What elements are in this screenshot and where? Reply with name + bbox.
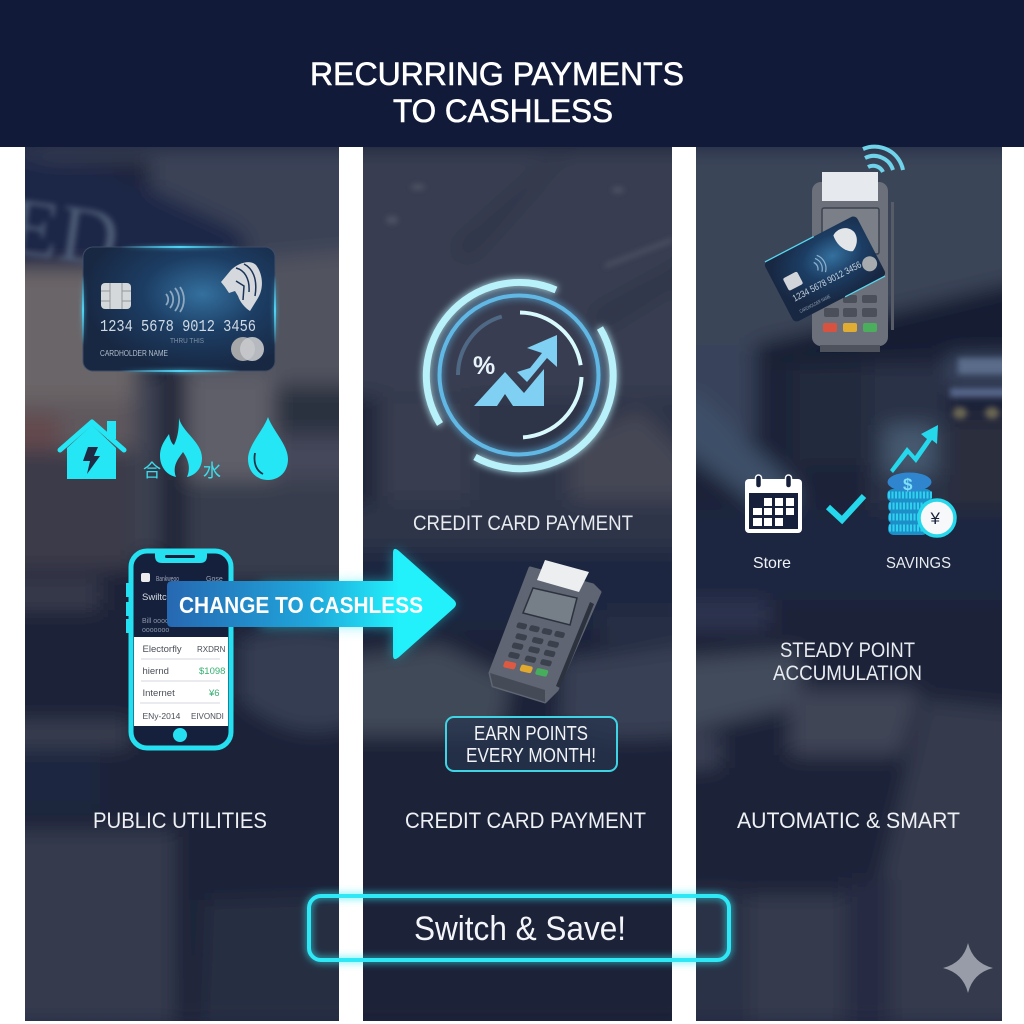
header band — [0, 0, 1024, 147]
icon: phone with bills: ooooooo — [142, 627, 169, 634]
panel: public utilities background — [25, 147, 339, 1021]
percent sign: % — [473, 352, 495, 380]
label: credit card payment column: CREDIT CARD PAYMENT — [405, 808, 646, 833]
icon: phone with bills: Gose — [206, 576, 223, 583]
icon: water drop — [248, 417, 288, 480]
arrow: change to cashless — [167, 548, 457, 660]
icon: phone with bills — [126, 551, 231, 748]
icon: credit card — [82, 246, 276, 372]
icon: flame — [143, 418, 221, 481]
icon: phone with bills: Swiltc — [142, 592, 167, 603]
icon: card terminal — [490, 560, 600, 702]
label: steady point accumulation: STEADY POINT — [780, 639, 915, 662]
bill rows: Internet — [142, 688, 175, 699]
card number: 1234 5678 9012 3456 — [100, 318, 256, 337]
label: credit card payment: CREDIT CARD PAYMENT — [413, 512, 633, 535]
icon: growth chart ring — [426, 282, 613, 469]
gas label: 合 — [143, 461, 161, 481]
icon: check mark — [828, 496, 864, 520]
card small text: THRU THIS — [170, 338, 204, 345]
icon: terminal with tapped card — [763, 147, 903, 352]
label: steady point accumulation: ACCUMULATION — [773, 662, 922, 685]
icon: lion emblem — [221, 262, 262, 311]
dollar sign: $ — [903, 475, 913, 494]
tapped card — [763, 215, 887, 323]
arrow: change to cashless: CHANGE TO CASHLESS — [179, 592, 423, 618]
water label: 水 — [203, 461, 221, 481]
icon: house with lightning — [60, 421, 124, 479]
bill rows: hiernd — [142, 666, 169, 677]
bill rows: ENy-2014 — [142, 711, 181, 721]
icon: sparkle — [943, 943, 993, 993]
title — [310, 56, 684, 129]
callout: earn points — [446, 717, 617, 771]
call to action: switch and save: Switch & Save! — [414, 910, 626, 948]
bill rows: $1098 — [199, 666, 225, 677]
title: RECURRING PAYMENTS — [310, 56, 684, 92]
bill rows: RXDRN — [197, 645, 226, 654]
label: store: Store — [753, 555, 791, 572]
bill rows — [142, 644, 226, 721]
call to action: switch and save — [309, 896, 729, 960]
bill rows: Electorfly — [142, 644, 182, 655]
bill rows: ¥6 — [208, 688, 220, 699]
callout: earn points: EVERY MONTH! — [466, 745, 596, 767]
panel: public utilities background: ED — [3, 180, 124, 285]
panel: credit card payment background — [363, 147, 672, 1021]
icon: coin stack and growth arrow — [887, 425, 955, 536]
wifi arcs — [863, 147, 903, 172]
icon: credit card: CARDHOLDER NAME — [100, 349, 168, 358]
label: automatic and smart: AUTOMATIC & SMART — [737, 808, 960, 833]
tapped card: CARDHOLDER NAME — [799, 294, 832, 315]
phone header text: Bankweoo — [156, 576, 179, 583]
callout: earn points: EARN POINTS — [474, 723, 588, 745]
title: TO CASHLESS — [393, 93, 613, 129]
bill rows: EIVONDI — [191, 712, 224, 721]
tapped card: 1234 5678 9012 3456 — [791, 260, 863, 304]
label: savings: SAVINGS — [886, 555, 951, 572]
panel: automatic and smart background — [696, 147, 1002, 1021]
label: public utilities: PUBLIC UTILITIES — [93, 808, 267, 833]
icon: calendar — [745, 475, 802, 533]
icon: phone with bills: Bill oooo — [142, 618, 169, 625]
label: steady point accumulation — [773, 639, 922, 685]
yen sign: ¥ — [930, 509, 940, 528]
